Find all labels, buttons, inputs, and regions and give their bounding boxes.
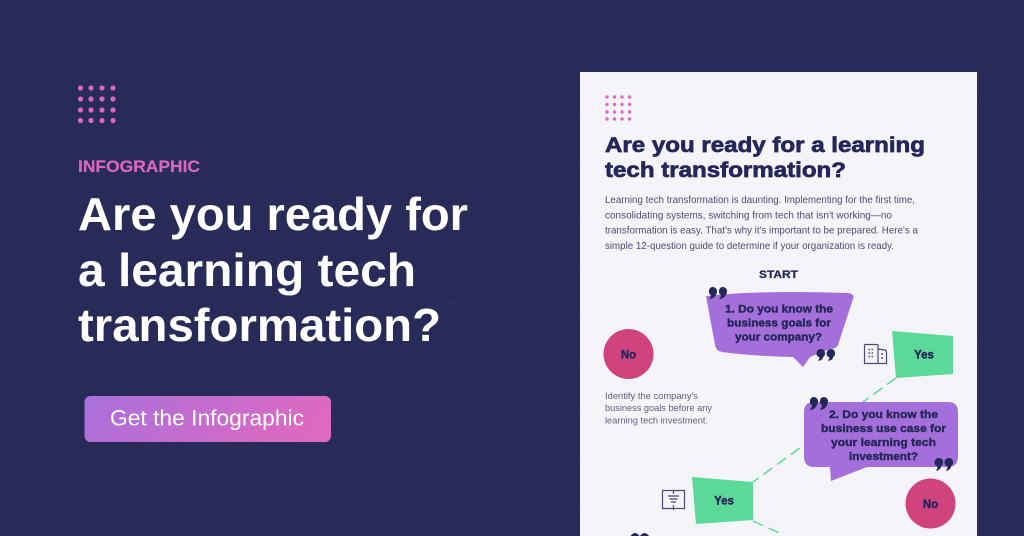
panel intro text: consolidating systems, switching from tech that isn't working—no [605,210,892,222]
icon: opening quote [810,397,828,410]
speech bubble: question 2: investment? [849,451,918,463]
speech bubble: question 1 [706,287,853,367]
panel heading: Are you ready for a learning [605,133,925,157]
icon: next question quote [630,533,649,536]
no circle 1 [604,329,654,379]
advice text: learning tech investment. [605,416,708,426]
panel intro text: Learning tech transformation is daunting. Implementing for the first time, [605,195,915,206]
advice text: Identify the company's [605,391,698,402]
speech bubble: question 2: your learning tech [831,437,936,449]
yes box 2 [692,477,753,524]
yes box 1 [892,331,953,378]
panel intro text: simple 12-question guide to determine if your organization is ready. [605,241,894,252]
icon: panel dot grid [605,95,631,121]
panel heading: tech transformation? [605,158,846,182]
advice text [605,391,712,426]
speech bubble: question 2 [804,397,958,481]
main heading [78,188,468,351]
speech bubble: question 1: 1. Do you know the [725,304,833,316]
icon: pink dot grid [78,85,116,123]
no circle 1: No [621,350,636,362]
yes box 1: Yes [914,350,934,362]
dashed connector: yes to next question [753,521,784,535]
no circle 2 [906,478,956,528]
start label: START [759,269,798,281]
icon: office building [864,344,886,364]
speech bubble: question 1: business goals for [727,318,832,330]
yes box 2: Yes [714,496,734,508]
panel intro text [605,195,918,252]
speech bubble: question 2: 2. Do you know the [829,409,938,421]
button: get the infographic: Get the Infographic [110,406,304,430]
panel heading [605,133,925,182]
eyebrow label: INFOGRAPHIC [78,158,200,176]
icon: closing quote [935,458,953,471]
speech bubble: question 1: your company? [735,332,822,344]
main heading: transformation? [78,299,441,351]
icon: book with wifi [662,490,684,510]
panel intro text: transformation is easy. That's why it's important to be prepared. Here's a [605,226,918,236]
icon: closing quote [817,349,835,361]
speech bubble: question 2: business use case for [821,423,947,435]
main heading: a learning tech [78,244,416,296]
icon: opening quote [709,287,727,299]
no circle 2: No [923,499,938,511]
panel: infographic preview [580,72,977,536]
dashed connector: yes to question 2 to yes [753,378,896,482]
button: get the infographic [84,396,331,442]
advice text: business goals before any [605,403,712,414]
main heading: Are you ready for [78,188,468,240]
